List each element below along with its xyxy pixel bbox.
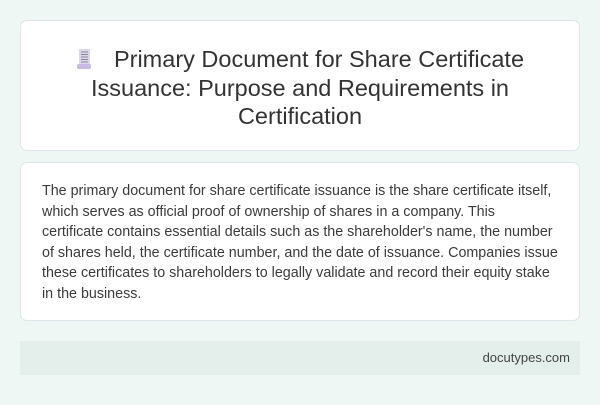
panel: title card	[20, 20, 580, 151]
panel: description	[20, 162, 580, 321]
text block: description: which serves as official proof of ownership of shares in a company. This	[42, 204, 495, 220]
footer	[20, 341, 580, 375]
text block: description	[42, 183, 558, 302]
footer: docutypes.com	[483, 350, 570, 365]
text block: description: in the business.	[42, 286, 141, 302]
text block: description: certificate contains essential details such as the shareholder's name, the number	[42, 224, 553, 240]
title: Primary Document for Share Certificate Issuance: Purpose and Requirements in Certification	[91, 46, 524, 129]
text block: description: these certificates to shareholders to legally validate and record their equity stake	[42, 265, 550, 281]
text block: description: of shares held, the certificate number, and the date of issuance. Companies issue	[42, 244, 558, 260]
text block: description: The primary document for share certificate issuance is the share certificate itself,	[42, 183, 551, 199]
icon: document scroll	[77, 49, 91, 69]
